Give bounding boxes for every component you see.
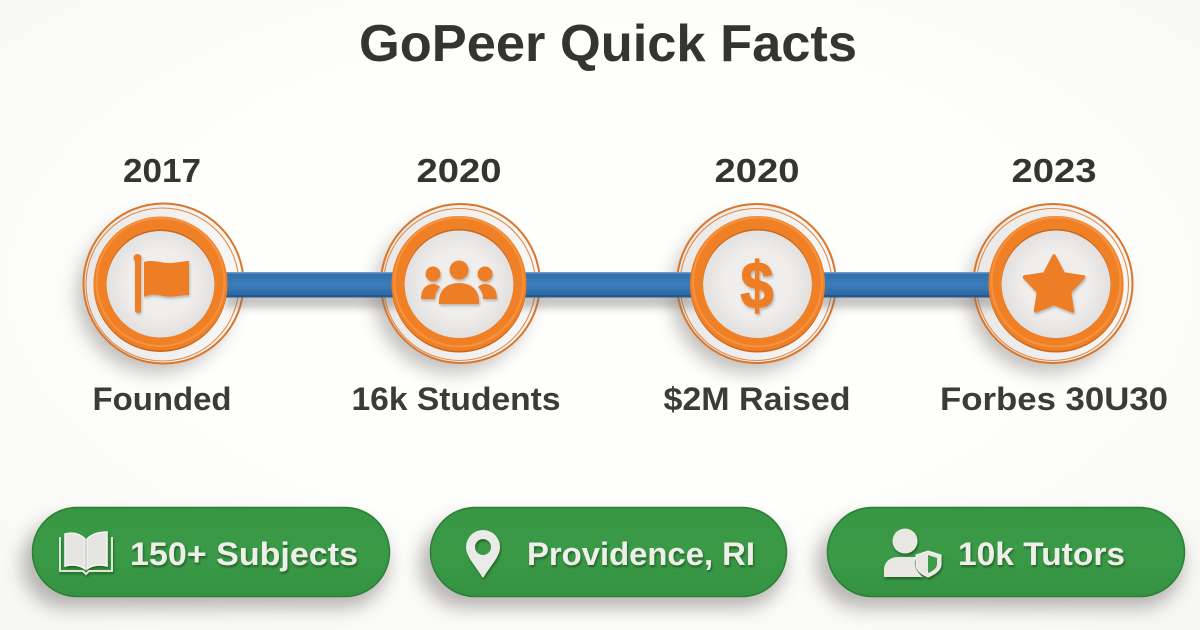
milestone: 2017 Founded (92, 152, 232, 417)
pill label: 10k Tutors (958, 536, 1125, 572)
outer ring: Founded (77, 204, 244, 373)
pill: Providence, RI (420, 507, 787, 608)
icon: map pin (466, 530, 500, 578)
milestone: 2020 $2M Raised (664, 152, 850, 417)
milestone: 2023 Forbes 30U30 (940, 152, 1168, 417)
icon: tutor with shield (884, 528, 941, 577)
label: 16k Students: 16k Students (352, 381, 560, 417)
label: $2M Raised: $2M Raised (664, 381, 850, 417)
year 2020: 2020 (714, 152, 800, 189)
pill label: Providence, RI (527, 536, 755, 572)
pill: 150+ Subjects (22, 507, 390, 608)
icon: ring (96, 218, 224, 346)
icon: star (1024, 256, 1084, 311)
outer ring: Students (374, 204, 540, 373)
icon: dollar sign: $ (740, 248, 774, 322)
icon: ring (394, 218, 524, 346)
label: Founded: Founded (92, 381, 232, 417)
label: Forbes 30U30: Forbes 30U30 (940, 381, 1168, 417)
outer ring: Raised (671, 204, 836, 373)
year 2020: 2020 (416, 152, 502, 189)
outer ring: Forbes (968, 204, 1132, 373)
year 2023: 2023 (1012, 152, 1096, 189)
icon: ring (693, 218, 822, 346)
pill label: 150+ Subjects (130, 536, 358, 572)
connector bar (225, 272, 1005, 308)
title: GoPeer Quick Facts (359, 15, 857, 73)
pill: 10k Tutors (817, 507, 1185, 608)
icon: open book (60, 532, 112, 574)
icon: people (421, 260, 497, 304)
icon: ring (992, 218, 1120, 346)
milestone: 2020 16k Students (352, 152, 560, 417)
year 2017: 2017 (123, 152, 201, 189)
icon: flag (134, 254, 189, 313)
